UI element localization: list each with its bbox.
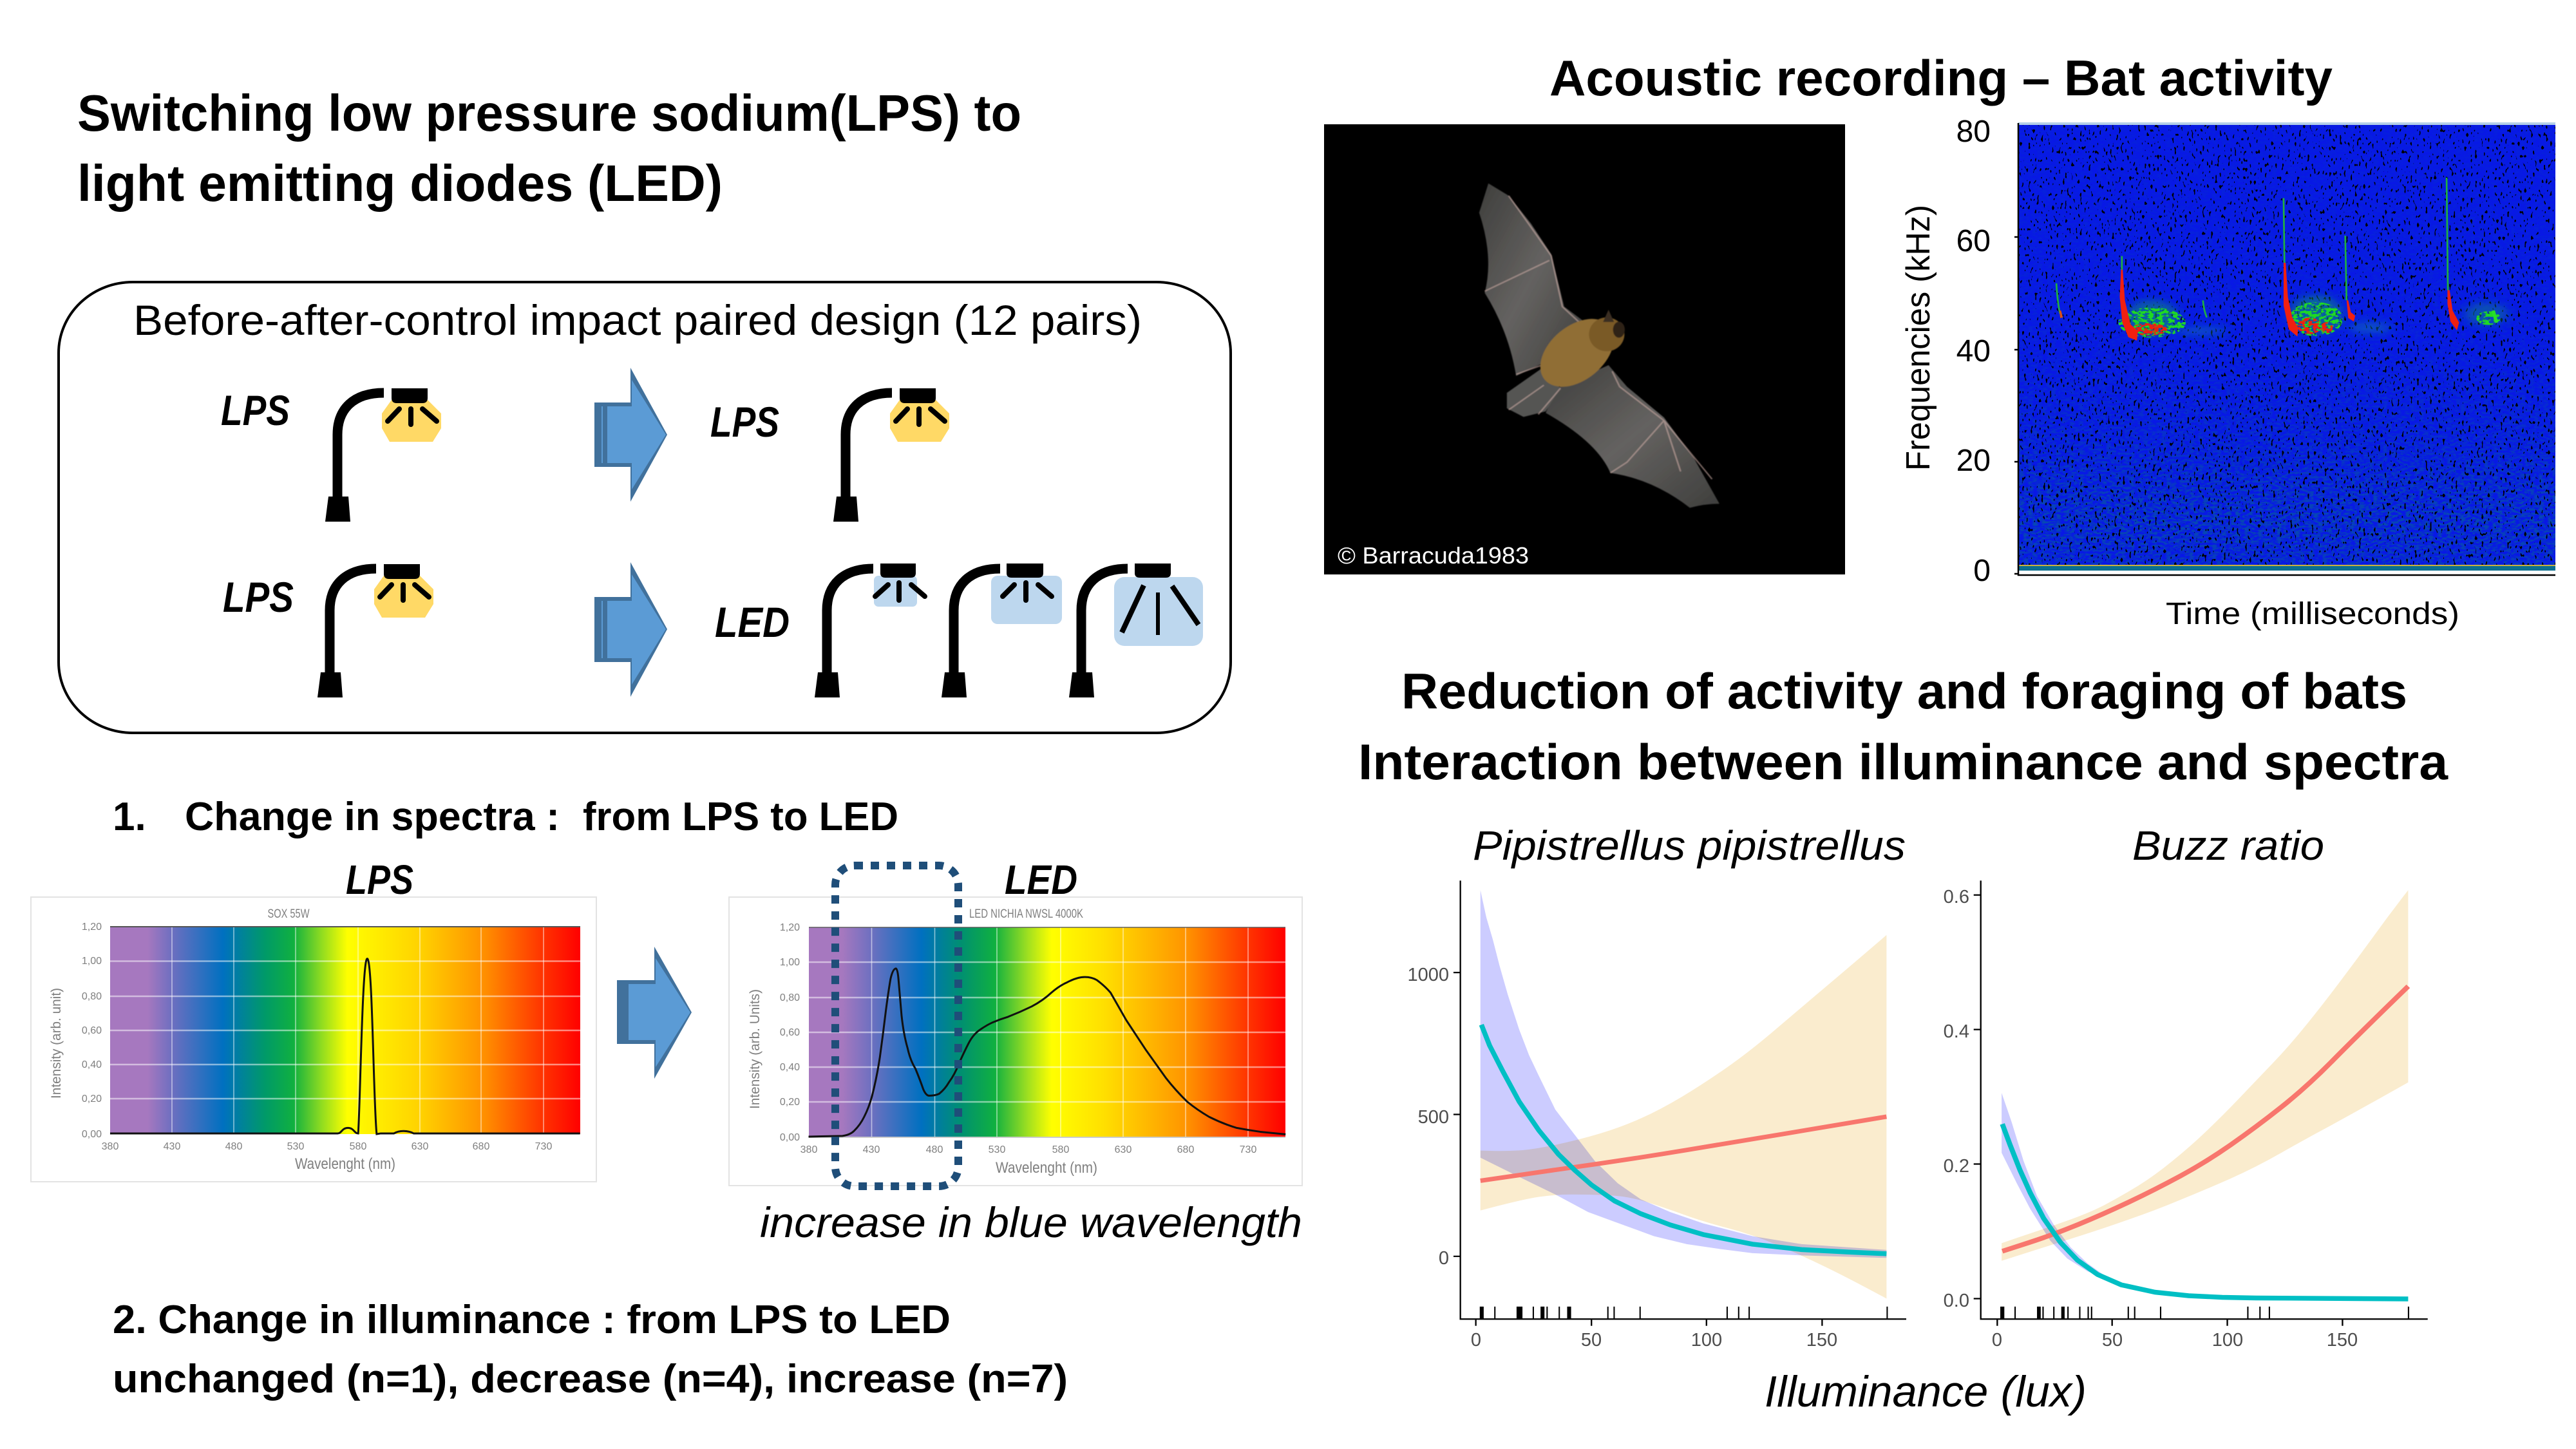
text block: change in illuminance: 2. Change in illuminance : from LPS to LED xyxy=(113,1298,951,1342)
chart: LPS spectrum SOX 55W: Intensity (arb. unit) xyxy=(49,988,64,1099)
signal: echolocation calls xyxy=(2056,178,2508,341)
arrow: impact pair xyxy=(594,562,667,697)
axis label: 80: 80 xyxy=(1956,115,1991,149)
photo: flying pipistrelle bat xyxy=(1324,124,1845,574)
text block: change in illuminance xyxy=(113,1298,1068,1401)
chart: bat call spectrogram xyxy=(1900,115,2555,631)
chart: LED spectrum NICHIA NWSL 4000K: 680 xyxy=(1177,1144,1194,1155)
chart: LED spectrum NICHIA NWSL 4000K: 730 xyxy=(1240,1144,1256,1155)
chart: LED spectrum NICHIA NWSL 4000K: 0,00 xyxy=(780,1132,800,1143)
icon: LED lamp unchanged illuminance xyxy=(942,564,1062,697)
title: switching LPS to LED xyxy=(77,84,1021,212)
chart: LED spectrum NICHIA NWSL 4000K: 0,40 xyxy=(780,1062,800,1073)
illustration: bat xyxy=(1479,184,1719,507)
chart: Pipistrellus pipistrellus activity vs illuminance: 0 xyxy=(1439,1248,1449,1269)
label: LED spectrum: LED xyxy=(1005,857,1077,903)
heading: acoustic recording: Acoustic recording – Bat activity xyxy=(1549,50,2333,106)
heading: reduction of activity and interaction: Interaction between illuminance and spectra xyxy=(1358,734,2448,790)
chart: LPS spectrum SOX 55W: 480 xyxy=(225,1141,242,1152)
callout: dotted box over blue wavelengths xyxy=(835,866,958,1186)
arrow: LPS to LED spectrum xyxy=(617,947,692,1079)
chart: LED spectrum NICHIA NWSL 4000K xyxy=(729,897,1302,1186)
chart: LED spectrum NICHIA NWSL 4000K: 530 xyxy=(989,1144,1005,1155)
icon: LED lamp decreased illuminance xyxy=(815,564,925,697)
chart: Pipistrellus pipistrellus activity vs illuminance: 50 xyxy=(1581,1330,1602,1350)
heading: Pipistrellus pipistrellus: Pipistrellus pipistrellus xyxy=(1473,822,1906,869)
heading: change in spectra: from LPS to LED xyxy=(583,795,898,839)
chart: Pipistrellus pipistrellus activity vs illuminance: 1000 xyxy=(1407,965,1449,985)
label: LPS impact before: LPS xyxy=(223,573,294,621)
heading: change in spectra xyxy=(113,795,898,839)
chart: LPS spectrum SOX 55W: 580 xyxy=(350,1141,366,1152)
curve: LED emission spectrum xyxy=(808,969,1285,1137)
axis label: 40: 40 xyxy=(1956,334,1991,368)
chart: LPS spectrum SOX 55W: 0,20 xyxy=(82,1094,102,1104)
chart: LPS spectrum SOX 55W: 530 xyxy=(287,1141,304,1152)
curve: LPS emission line xyxy=(110,959,580,1134)
chart: Pipistrellus pipistrellus activity vs illuminance: 150 xyxy=(1806,1330,1837,1350)
title: switching LPS to LED: light emitting diodes (LED) xyxy=(77,155,723,212)
chart: LED spectrum NICHIA NWSL 4000K: 580 xyxy=(1052,1144,1069,1155)
axis label: 0: 0 xyxy=(1973,554,1991,588)
chart: LPS spectrum SOX 55W: 630 xyxy=(412,1141,428,1152)
chart: LED spectrum NICHIA NWSL 4000K: Wavelenght (nm) xyxy=(996,1159,1097,1177)
chart: LED spectrum NICHIA NWSL 4000K: 380 xyxy=(800,1144,817,1155)
heading: Buzz ratio: Buzz ratio xyxy=(2132,822,2324,869)
label: LPS spectrum: LPS xyxy=(346,857,413,903)
chart: LED spectrum NICHIA NWSL 4000K: Intensity (arb. Units) xyxy=(748,989,762,1109)
chart: LPS spectrum SOX 55W: 1,20 xyxy=(82,922,102,933)
chart: LED spectrum NICHIA NWSL 4000K: 1,00 xyxy=(780,957,800,968)
icon: yellow street lamp control after xyxy=(833,388,949,522)
chart: LPS spectrum SOX 55W: 0,40 xyxy=(82,1059,102,1070)
heading: change in spectra: Change in spectra : xyxy=(185,795,560,839)
chart: LED spectrum NICHIA NWSL 4000K: 430 xyxy=(863,1144,880,1155)
axis title: time: Time (milliseconds) xyxy=(2166,597,2459,631)
chart: buzz ratio vs illuminance: 0 xyxy=(1992,1330,2002,1350)
chart: LPS spectrum SOX 55W: 730 xyxy=(535,1141,552,1152)
axis title: frequencies: Frequencies (kHz) xyxy=(1900,205,1937,471)
chart: LPS spectrum SOX 55W: Wavelenght (nm) xyxy=(295,1155,395,1173)
label: LPS control after: LPS xyxy=(710,398,779,446)
chart: Pipistrellus pipistrellus activity vs illuminance: 100 xyxy=(1691,1330,1722,1350)
chart: Pipistrellus pipistrellus activity vs illuminance: 500 xyxy=(1418,1107,1449,1128)
chart: LED spectrum NICHIA NWSL 4000K: 0,60 xyxy=(780,1027,800,1038)
chart: LED spectrum NICHIA NWSL 4000K: 630 xyxy=(1115,1144,1132,1155)
icon: yellow street lamp impact before xyxy=(317,564,433,697)
chart: LED spectrum NICHIA NWSL 4000K: 1,20 xyxy=(780,922,800,933)
chart: Pipistrellus pipistrellus activity vs illuminance: 0 xyxy=(1471,1330,1481,1350)
chart: buzz ratio vs illuminance: 0.2 xyxy=(1944,1156,1969,1177)
axis title: illuminance: Illuminance (lux) xyxy=(1765,1367,2087,1416)
chart: buzz ratio vs illuminance: 100 xyxy=(2212,1330,2243,1350)
chart: LPS spectrum SOX 55W: 1,00 xyxy=(82,956,102,967)
icon: yellow street lamp control before xyxy=(325,388,441,522)
text: increase in blue wavelength: increase in blue wavelength xyxy=(760,1198,1302,1246)
label: LED impact after: LED xyxy=(715,598,790,646)
chart: buzz ratio vs illuminance: 0.4 xyxy=(1944,1021,1969,1042)
heading: reduction of activity and interaction xyxy=(1358,663,2448,790)
chart: buzz ratio vs illuminance: 50 xyxy=(2102,1330,2123,1350)
arrow: control pair xyxy=(594,368,667,502)
chart: LPS spectrum SOX 55W: 430 xyxy=(164,1141,180,1152)
chart: LPS spectrum SOX 55W: 680 xyxy=(473,1141,489,1152)
panel: before-after-control impact design xyxy=(59,282,1231,733)
chart: LED spectrum NICHIA NWSL 4000K: LED NICHIA NWSL 4000K xyxy=(969,907,1083,921)
title: switching LPS to LED: Switching low pressure sodium(LPS) to xyxy=(77,84,1021,142)
chart: LED spectrum NICHIA NWSL 4000K: 0,20 xyxy=(780,1097,800,1108)
axis label: 20: 20 xyxy=(1956,444,1991,478)
heading: paired design: Before-after-control impact paired design (12 pairs) xyxy=(133,296,1142,344)
text block: change in illuminance: unchanged (n=1), decrease (n=4), increase (n=7) xyxy=(113,1357,1068,1401)
axis label: 60: 60 xyxy=(1956,224,1991,258)
chart: buzz ratio vs illuminance: 150 xyxy=(2327,1330,2358,1350)
chart: LPS spectrum SOX 55W xyxy=(31,897,596,1182)
heading: change in spectra: 1. xyxy=(113,795,146,839)
chart: LPS spectrum SOX 55W: SOX 55W xyxy=(268,907,310,921)
chart: LPS spectrum SOX 55W: 0,00 xyxy=(82,1129,102,1140)
label: LPS control before: LPS xyxy=(221,386,290,434)
chart: LPS spectrum SOX 55W: 0,80 xyxy=(82,991,102,1002)
chart: Pipistrellus pipistrellus activity vs illuminance xyxy=(1407,880,1906,1350)
icon: LED lamp increased illuminance xyxy=(1069,564,1203,697)
chart: LPS spectrum SOX 55W: 0,60 xyxy=(82,1025,102,1036)
chart: LED spectrum NICHIA NWSL 4000K: 480 xyxy=(926,1144,943,1155)
chart: LED spectrum NICHIA NWSL 4000K: 0,80 xyxy=(780,992,800,1003)
heading: reduction of activity and interaction: Reduction of activity and foraging of bats xyxy=(1401,663,2407,719)
chart: buzz ratio vs illuminance xyxy=(1944,880,2428,1350)
caption: photo credit: © Barracuda1983 xyxy=(1338,542,1529,569)
chart: LPS spectrum SOX 55W: 380 xyxy=(102,1141,118,1152)
chart: buzz ratio vs illuminance: 0.0 xyxy=(1944,1291,1969,1311)
chart: buzz ratio vs illuminance: 0.6 xyxy=(1944,887,1969,907)
